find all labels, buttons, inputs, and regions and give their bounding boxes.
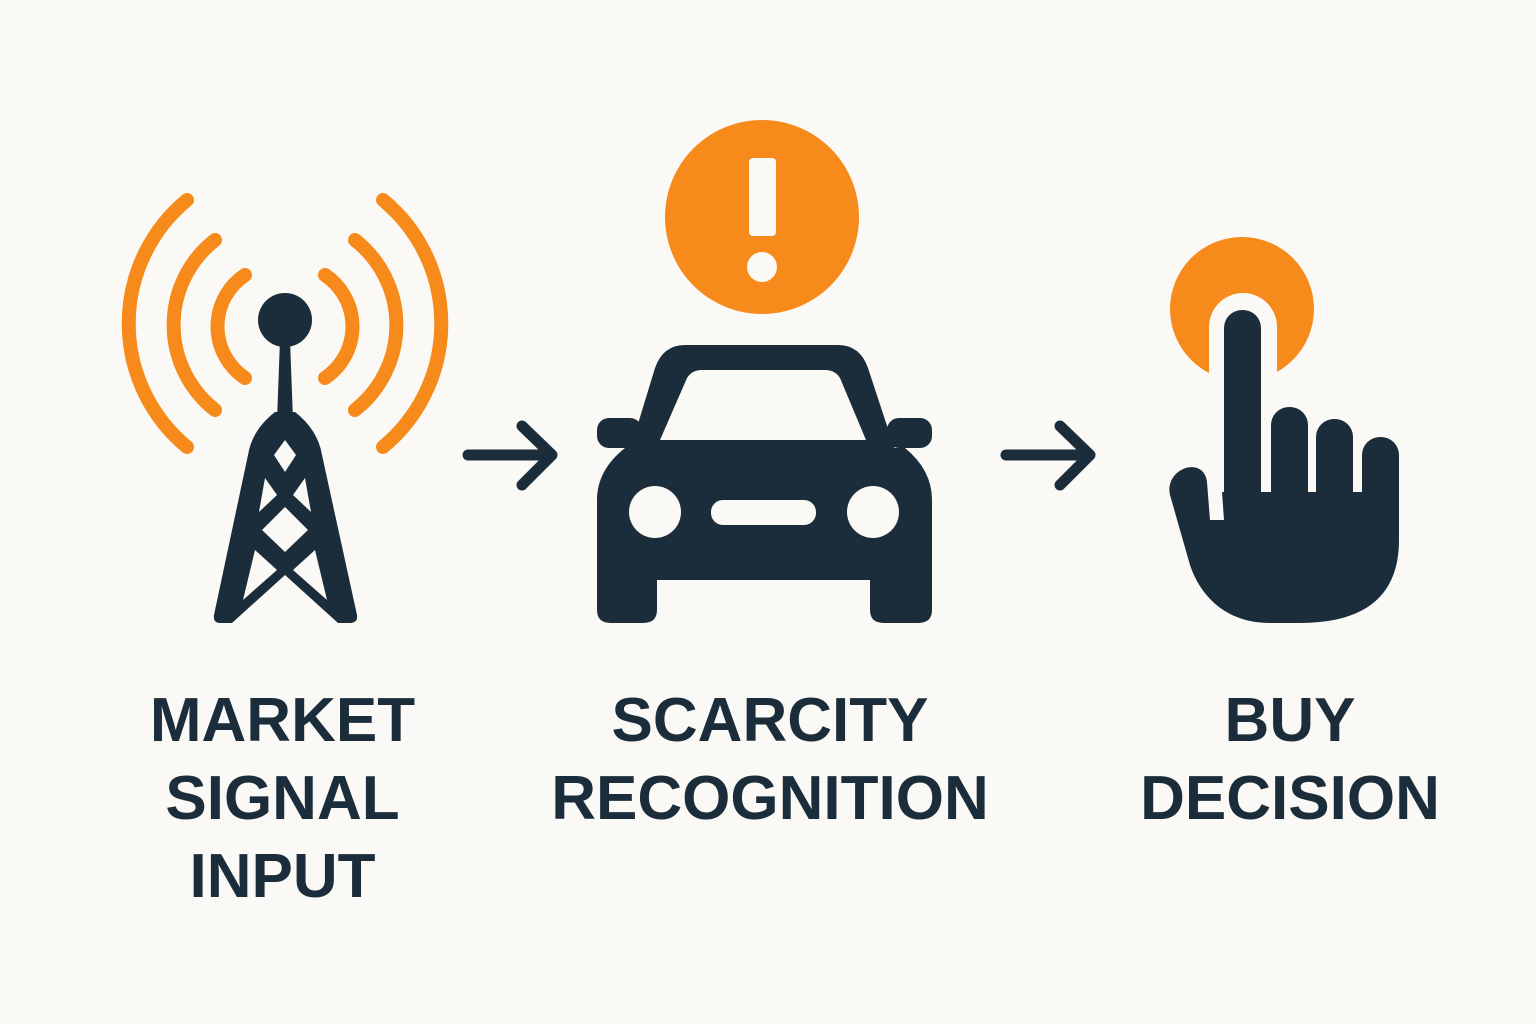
signal waves xyxy=(129,200,441,447)
label: scarcity recognition xyxy=(551,686,989,833)
icon: signal tower xyxy=(129,200,441,623)
arrow 2 xyxy=(1006,426,1090,485)
label: scarcity recognition: SCARCITY xyxy=(612,686,928,755)
label: buy decision: DECISION xyxy=(1140,764,1440,833)
label: market signal input xyxy=(150,686,415,911)
icon: alert circle xyxy=(665,120,859,314)
arrow 1 xyxy=(468,426,552,485)
icon: car xyxy=(597,345,932,623)
label: buy decision: BUY xyxy=(1225,686,1355,755)
icon: pointing hand xyxy=(1169,237,1399,623)
label: market signal input: INPUT xyxy=(190,842,376,911)
label: market signal input: MARKET xyxy=(150,686,415,755)
label: buy decision xyxy=(1140,686,1440,833)
label: scarcity recognition: RECOGNITION xyxy=(551,764,989,833)
label: market signal input: SIGNAL xyxy=(165,764,400,833)
